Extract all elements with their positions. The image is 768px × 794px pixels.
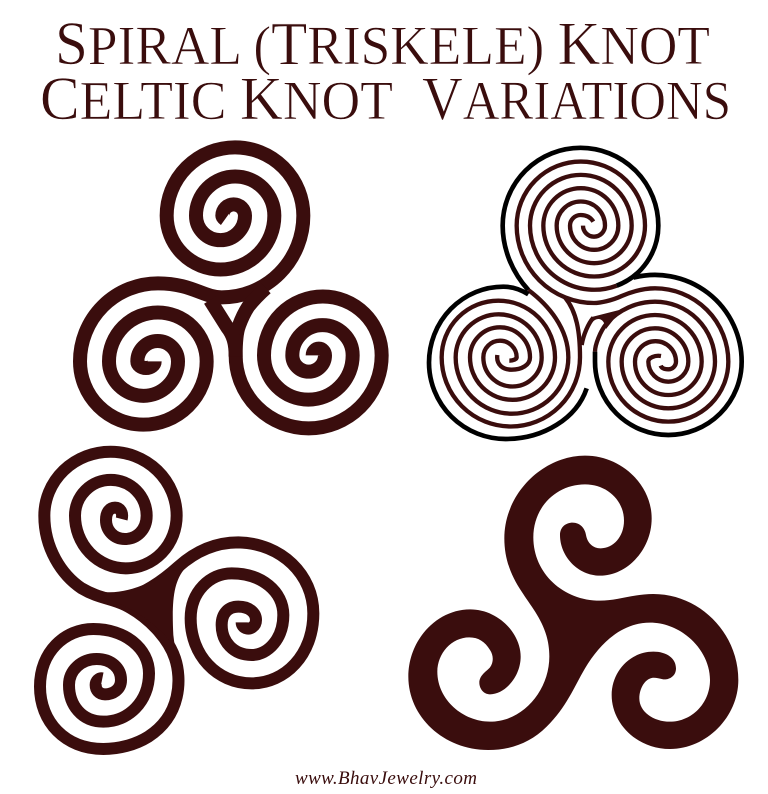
title line 2 right part: VARIATIONS (422, 66, 731, 133)
black outer band of right spiral (595, 275, 742, 435)
black outer band of top spiral (503, 148, 658, 290)
black outer band of left spiral (429, 287, 587, 439)
title (40, 11, 731, 133)
top spiral running into bottom spiral (40, 452, 178, 749)
top spiral arm running into right spiral (517, 162, 728, 422)
knot 2: fine line triple spiral (429, 148, 742, 439)
left branch of central junction (210, 300, 236, 357)
right spiral inner arm (595, 302, 715, 408)
top spiral second arm (530, 175, 632, 290)
left spiral arm from top spiral (456, 290, 568, 414)
junction branch (582, 318, 593, 345)
right spiral (236, 288, 382, 428)
knot 4: solid triskele (408, 456, 738, 750)
junction wedge (592, 309, 622, 329)
solid centre wedge (102, 568, 185, 648)
title line 2 left part: CELTIC KNOT (40, 66, 393, 133)
footer website address: www.BhavJewelry.com (295, 768, 477, 789)
left spiral arm from junction (442, 297, 580, 426)
top and left spirals, joined (80, 147, 303, 425)
title line 1: SPIRAL (TRISKELE) KNOT (55, 11, 710, 78)
right spiral (125, 542, 313, 683)
knot 3: hand drawn triple spiral with solid centre (40, 452, 313, 749)
knot 1: bold triple spiral with triangle centre (80, 147, 382, 428)
